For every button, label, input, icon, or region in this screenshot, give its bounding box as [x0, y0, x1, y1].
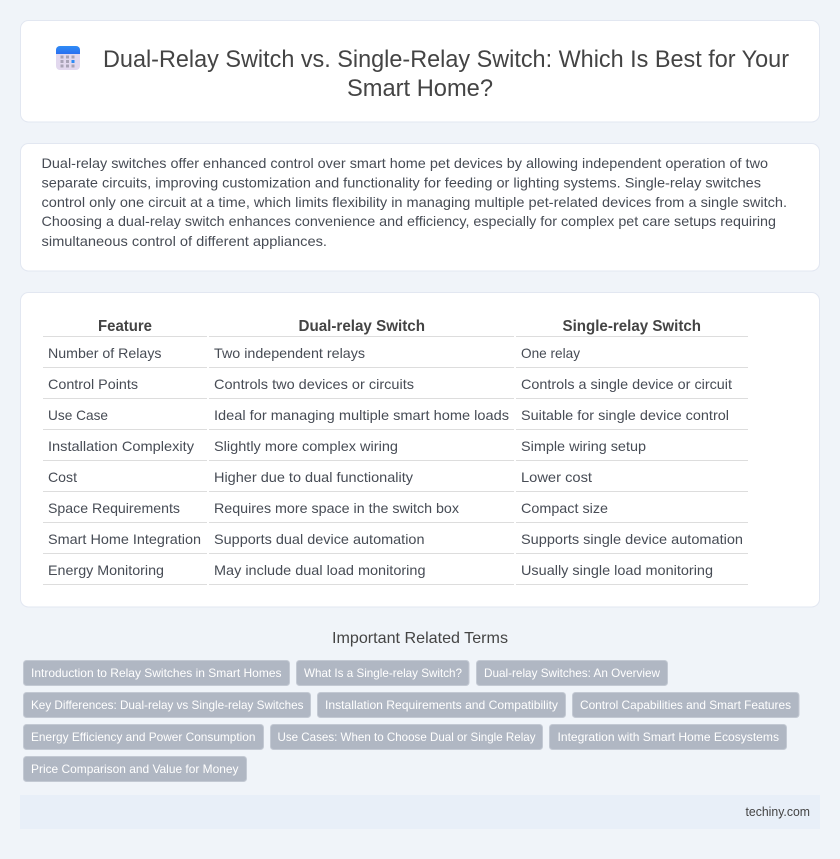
row: smart home integration: Smart Home Integration: [48, 531, 201, 547]
tag: [270, 724, 542, 750]
panel: introduction text: Choosing a dual-relay switch enhances convenience and efficiency, especially for complex pet care setups requiring: [42, 213, 776, 229]
panel: introduction text: [20, 144, 820, 271]
tag: [24, 692, 310, 718]
icon: calendar: [56, 46, 80, 70]
row: control points: Controls a single device or circuit: [521, 376, 732, 392]
row: cost: Cost: [48, 469, 77, 485]
row: number of relays: [48, 345, 580, 361]
row: space requirements: Requires more space in the switch box: [214, 500, 459, 516]
row: use case: Use Case: [48, 407, 108, 423]
row: number of relays: Number of Relays: [48, 345, 162, 361]
tag: [476, 660, 668, 686]
row: control points: [48, 376, 732, 392]
row: energy monitoring: Energy Monitoring: [48, 562, 164, 578]
panel: introduction text: control only one circuit at a time, which limits flexibility in managing multiple pet-related devices from a single switch.: [42, 194, 787, 210]
row: control points: Controls two devices or circuits: [214, 376, 414, 392]
tag: [296, 660, 469, 686]
tag: Installation Requirements and Compatibility: [325, 698, 558, 712]
row: space requirements: Space Requirements: [48, 500, 180, 516]
tag: Control Capabilities and Smart Features: [580, 698, 791, 712]
panel: header: [20, 20, 820, 122]
row: use case: Suitable for single device control: [521, 407, 729, 423]
table header: Dual-relay Switch: [298, 318, 425, 335]
related term tags: [24, 660, 799, 782]
table header: Feature: [98, 318, 152, 335]
row: number of relays: One relay: [521, 345, 580, 361]
tag: Key Differences: Dual-relay vs Single-relay Switches: [31, 698, 304, 712]
row: installation complexity: Simple wiring setup: [521, 438, 646, 454]
tag: Price Comparison and Value for Money: [31, 762, 238, 776]
tag: Introduction to Relay Switches in Smart Homes: [31, 666, 282, 680]
title: [103, 46, 789, 102]
panel: introduction text: simultaneous control of different appliances.: [42, 233, 327, 249]
row: cost: Lower cost: [521, 469, 592, 485]
panel: comparison table: [20, 292, 820, 607]
tag: [24, 660, 290, 686]
tag: [24, 724, 264, 750]
row: smart home integration: Supports dual device automation: [214, 531, 424, 547]
tag: [572, 692, 799, 718]
table header: Single-relay Switch: [562, 318, 701, 335]
row: cost: [48, 469, 592, 485]
tag: Integration with Smart Home Ecosystems: [558, 730, 779, 744]
tag: [24, 756, 246, 782]
row: installation complexity: Slightly more complex wiring: [214, 438, 398, 454]
tag: Use Cases: When to Choose Dual or Single Relay: [278, 730, 536, 744]
panel: introduction text: separate circuits, improving customization and functionality for feeding or lighting systems. Single-relay switches: [42, 174, 761, 190]
row: installation complexity: [48, 438, 646, 454]
title: Smart Home?: [347, 75, 493, 102]
heading: important related terms: Important Related Terms: [332, 630, 508, 647]
row: energy monitoring: Usually single load monitoring: [521, 562, 713, 578]
row: energy monitoring: May include dual load monitoring: [214, 562, 426, 578]
footer: techiny.com: [746, 805, 810, 819]
row: smart home integration: [48, 531, 743, 547]
row: energy monitoring: [48, 562, 713, 578]
row: installation complexity: Installation Complexity: [48, 438, 194, 454]
row: cost: Higher due to dual functionality: [214, 469, 413, 485]
row: use case: Ideal for managing multiple smart home loads: [214, 407, 509, 423]
panel: introduction text: Dual-relay switches offer enhanced control over smart home pet devices by allowing independent operation of two: [42, 155, 768, 171]
tag: Energy Efficiency and Power Consumption: [31, 730, 256, 744]
row: space requirements: [48, 500, 608, 516]
tag: [318, 692, 566, 718]
row: space requirements: Compact size: [521, 500, 608, 516]
tag: Dual-relay Switches: An Overview: [484, 666, 660, 680]
row: use case: [48, 407, 729, 423]
row: smart home integration: Supports single device automation: [521, 531, 743, 547]
title: Dual-Relay Switch vs. Single-Relay Switch: Which Is Best for Your: [103, 46, 789, 73]
tag: What Is a Single-relay Switch?: [304, 666, 462, 680]
footer: [20, 795, 820, 829]
table header: [98, 318, 701, 335]
tag: [550, 724, 786, 750]
row: number of relays: Two independent relays: [214, 345, 365, 361]
row: control points: Control Points: [48, 376, 138, 392]
